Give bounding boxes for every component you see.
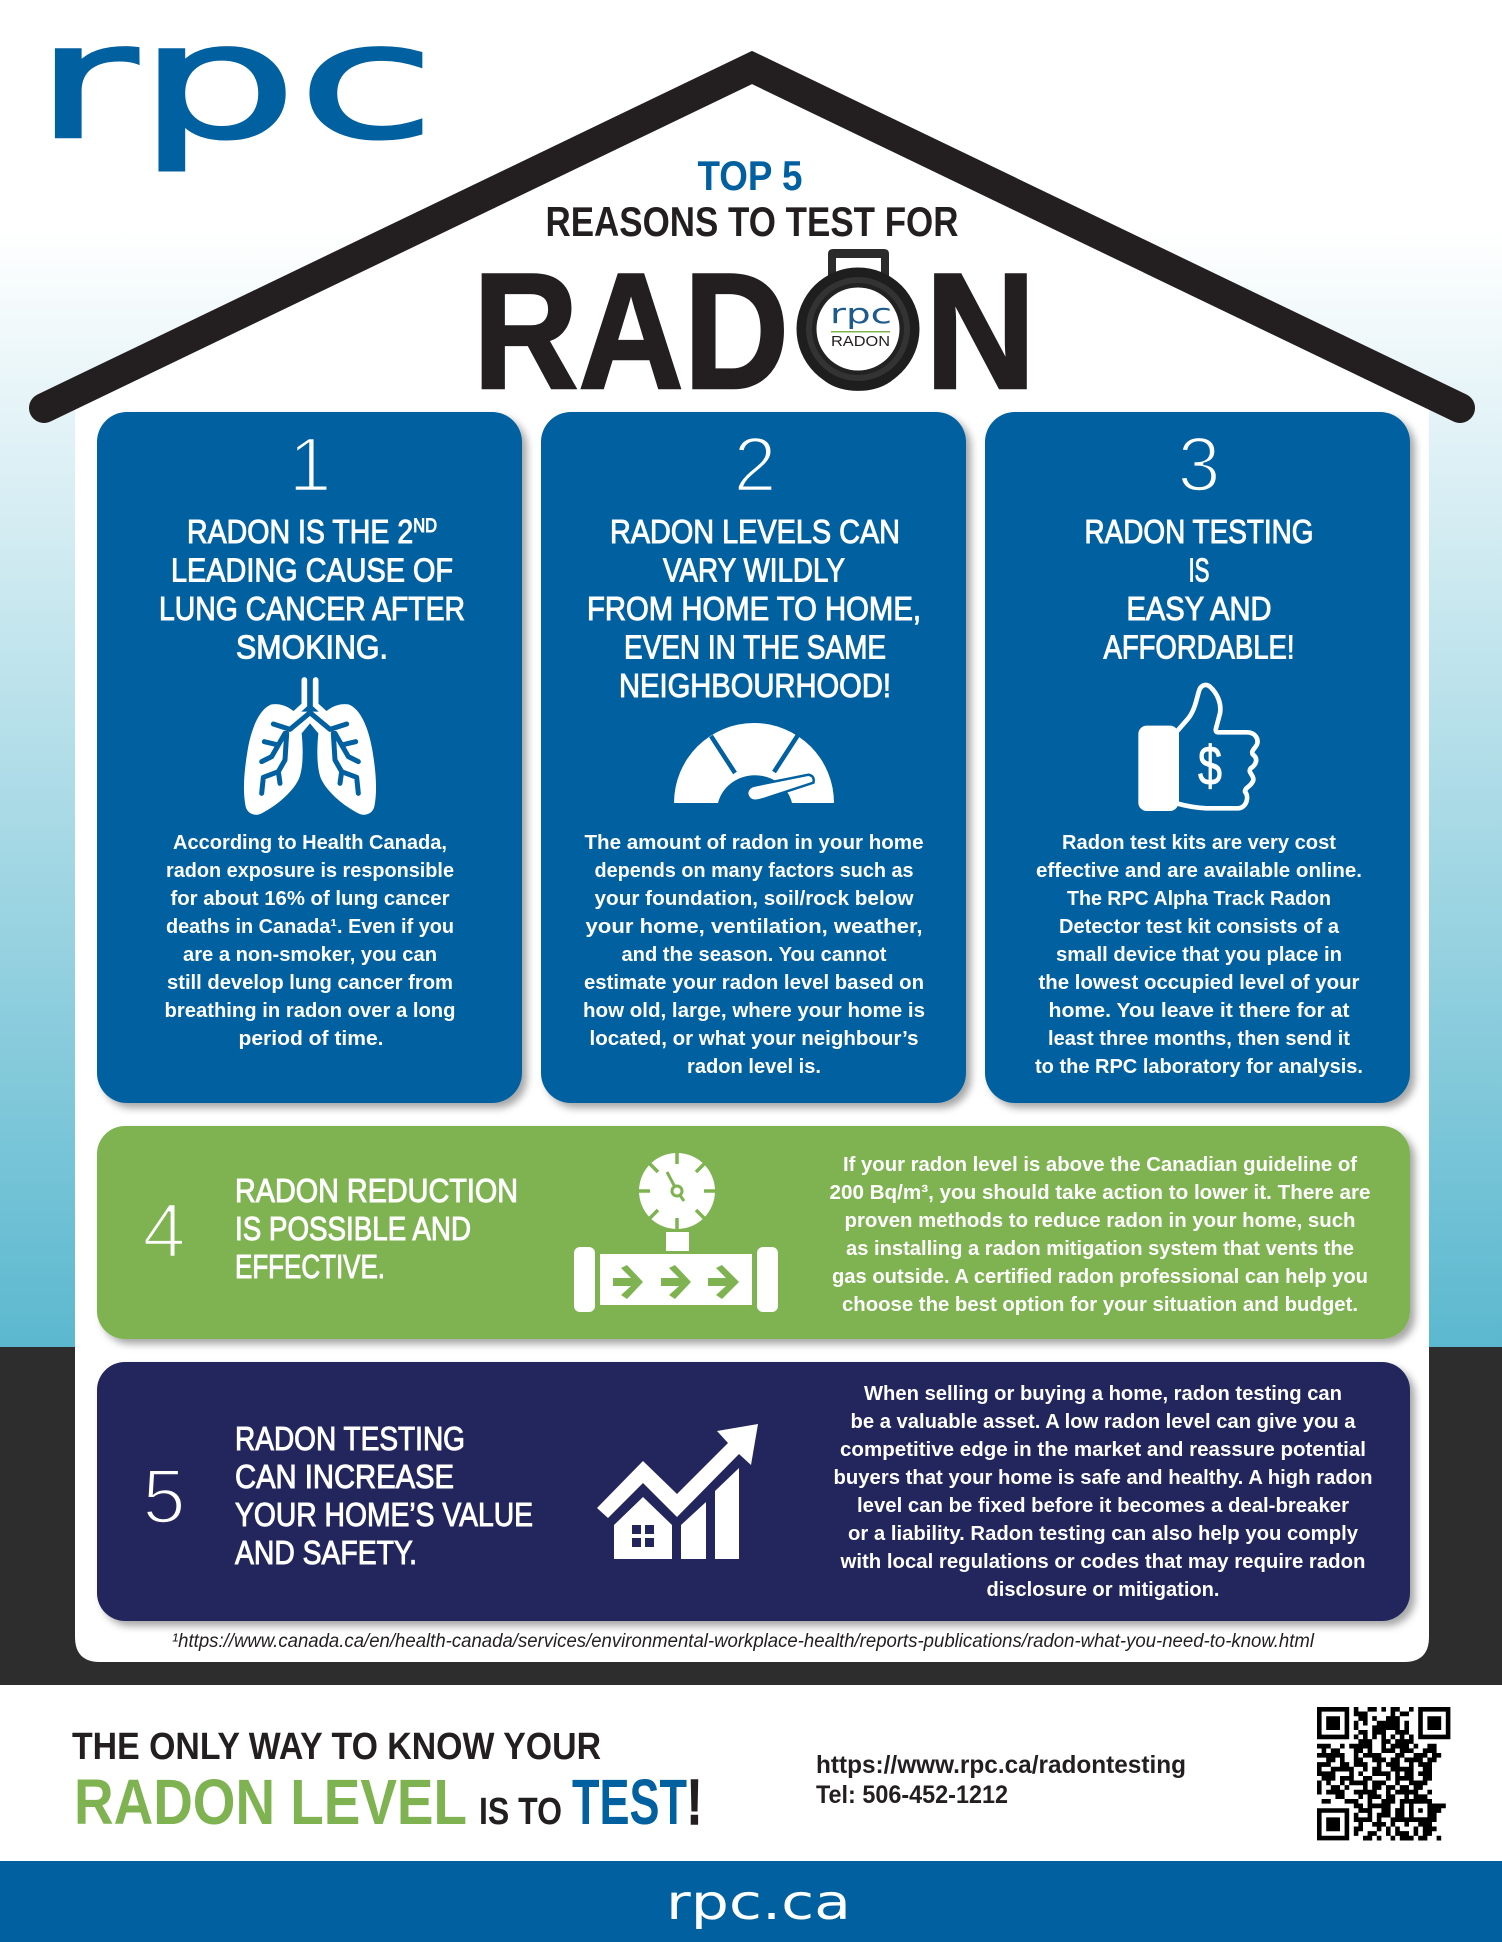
- heading 3: RADON TESTING: [1084, 513, 1314, 550]
- title: radon word: O: [798, 239, 919, 423]
- icon: thumbs up with dollar: [1138, 685, 1258, 811]
- body text 5: When selling or buying a home, radon testing can: [864, 1382, 1342, 1405]
- title: radon word: RAD: [473, 239, 789, 423]
- body text 1: breathing in radon over a long: [164, 999, 456, 1022]
- heading 2: VARY WILDLY: [663, 552, 845, 588]
- body text 1: According to Health Canada,: [173, 831, 447, 854]
- body text 2: your foundation, soil/rock below: [594, 887, 914, 910]
- body text 5: disclosure or mitigation.: [986, 1578, 1220, 1601]
- footer: blue strip: [0, 1861, 1502, 1942]
- body text 3: to the RPC laboratory for analysis.: [1035, 1055, 1363, 1078]
- heading 4: [235, 1172, 518, 1285]
- heading 4: EFFECTIVE.: [235, 1248, 385, 1285]
- body text 3: The RPC Alpha Track Radon: [1067, 887, 1331, 910]
- contact details: https://www.rpc.ca/radontesting: [816, 1751, 1186, 1779]
- body text 4: gas outside. A certified radon professional can help you: [832, 1265, 1368, 1288]
- panel: reason 2: [541, 412, 966, 1103]
- heading 2: RADON LEVELS CAN: [610, 513, 900, 550]
- heading 2: EVEN IN THE SAME: [624, 628, 886, 666]
- body text 1: radon exposure is responsible: [166, 859, 454, 882]
- body text 5: [834, 1382, 1372, 1601]
- body text 5: with local regulations or codes that may require radon: [840, 1550, 1366, 1573]
- body text 3: Detector test kit consists of a: [1059, 915, 1340, 938]
- body text 2: radon level is.: [687, 1055, 821, 1078]
- body text 5: competitive edge in the market and reassure potential: [840, 1438, 1366, 1461]
- body text 4: proven methods to reduce radon in your home, such: [844, 1209, 1356, 1232]
- footer: white strip: [0, 1685, 1502, 1861]
- icon: lungs: [244, 680, 376, 815]
- contact details: Tel: 506-452-1212: [816, 1781, 1008, 1809]
- body text 3: home. You leave it there for at: [1048, 999, 1350, 1022]
- body text 2: [583, 831, 925, 1078]
- icon: pipe with pressure gauge: [574, 1153, 778, 1312]
- body text 1: deaths in Canada¹. Even if you: [166, 915, 454, 938]
- title: top 5: TOP 5: [698, 152, 802, 199]
- heading 5: YOUR HOME’S VALUE: [235, 1496, 533, 1533]
- heading 1: LEADING CAUSE OF: [171, 552, 453, 588]
- heading 3: [1084, 513, 1314, 666]
- number 1: 1: [289, 422, 331, 508]
- house body: [75, 66, 1429, 1662]
- panel: reason 5: [97, 1362, 1410, 1621]
- heading 2: NEIGHBOURHOOD!: [619, 667, 891, 704]
- footer slogan: THE ONLY WAY TO KNOW YOUR: [72, 1726, 601, 1768]
- heading 3: EASY AND: [1126, 590, 1272, 627]
- number 4: 4: [143, 1188, 185, 1274]
- number 2: 2: [734, 422, 776, 508]
- footer logo: rpc.ca: rpc.ca: [666, 1875, 851, 1931]
- heading 1: ND: [413, 516, 437, 537]
- body text 3: effective and are available online.: [1036, 859, 1362, 882]
- title: radon word: N: [925, 239, 1036, 423]
- heading 5: AND SAFETY.: [235, 1534, 417, 1571]
- footer slogan: TEST: [572, 1766, 687, 1838]
- footer slogan: [72, 1726, 702, 1838]
- heading 3: IS: [1188, 552, 1210, 588]
- body text 2: located, or what your neighbour’s: [590, 1027, 918, 1050]
- panel: reason 4: [97, 1126, 1410, 1339]
- body text 4: choose the best option for your situation and budget.: [842, 1293, 1358, 1316]
- body text 5: or a liability. Radon testing can also help you comply: [848, 1522, 1359, 1545]
- body text 1: [164, 831, 456, 1050]
- heading 1: [159, 513, 465, 666]
- panel: reason 1: [97, 412, 522, 1103]
- body text 3: least three months, then send it: [1048, 1027, 1350, 1050]
- body text 2: and the season. You cannot: [622, 943, 887, 966]
- icon: radon detector: [796, 249, 920, 390]
- heading 4: IS POSSIBLE AND: [235, 1210, 471, 1247]
- heading 1: SMOKING.: [236, 628, 388, 666]
- icon: radon detector: rpc: [830, 297, 892, 330]
- body text 1: still develop lung cancer from: [167, 971, 453, 994]
- footer slogan: RADON LEVEL: [74, 1766, 467, 1838]
- panel: reason 3: [985, 412, 1410, 1103]
- body text 2: The amount of radon in your home: [584, 831, 924, 854]
- title: radon word: [473, 239, 1036, 423]
- contact details: [816, 1751, 1186, 1809]
- footer slogan: IS TO: [479, 1791, 562, 1833]
- heading 1: LUNG CANCER AFTER: [159, 590, 465, 627]
- body text 1: for about 16% of lung cancer: [170, 887, 450, 910]
- body text 2: your home, ventilation, weather,: [586, 915, 922, 938]
- icon: house with rising chart: [597, 1424, 758, 1559]
- body text 2: depends on many factors such as: [594, 859, 914, 882]
- body text 1: are a non-smoker, you can: [183, 943, 437, 966]
- body text 2: how old, large, where your home is: [583, 999, 925, 1022]
- body text 3: small device that you place in: [1056, 943, 1342, 966]
- heading 2: FROM HOME TO HOME,: [587, 590, 921, 627]
- heading 2: [587, 513, 921, 704]
- heading 5: [235, 1420, 533, 1571]
- body text 5: level can be fixed before it becomes a deal-breaker: [857, 1494, 1349, 1517]
- body text 4: [830, 1153, 1370, 1316]
- background: sky gradient: [0, 0, 1502, 1347]
- heading 4: RADON REDUCTION: [235, 1172, 518, 1209]
- body text 4: 200 Bq/m³, you should take action to lower it. There are: [830, 1181, 1370, 1204]
- icon: radon detector: RADON: [831, 334, 890, 350]
- footnote: ¹https://www.canada.ca/en/health-canada/services/environmental-workplace-health/reports-publications/radon-what-you-need-to-know.html: [172, 1631, 1315, 1652]
- body text 4: If your radon level is above the Canadian guideline of: [843, 1153, 1357, 1176]
- body text 5: be a valuable asset. A low radon level can give you a: [850, 1410, 1356, 1433]
- footer slogan: !: [687, 1766, 702, 1838]
- body text 3: [1035, 831, 1363, 1078]
- icon: gauge: [674, 723, 834, 803]
- heading 1: RADON IS THE 2: [187, 513, 449, 550]
- number 3: 3: [1178, 422, 1220, 508]
- body text 3: Radon test kits are very cost: [1062, 831, 1336, 854]
- body text 4: as installing a radon mitigation system that vents the: [846, 1237, 1354, 1260]
- background: dark ground band: [0, 1347, 1502, 1685]
- body text 2: estimate your radon level based on: [584, 971, 924, 994]
- roof: [44, 68, 1460, 408]
- title block: [473, 152, 1036, 423]
- number 5: 5: [143, 1454, 185, 1540]
- QR code: [1317, 1707, 1450, 1840]
- body text 1: period of time.: [238, 1027, 384, 1050]
- body text 5: buyers that your home is safe and healthy. A high radon: [834, 1466, 1372, 1489]
- title: reasons to test for: REASONS TO TEST FOR: [546, 198, 958, 245]
- heading 3: AFFORDABLE!: [1104, 628, 1294, 666]
- body text 3: the lowest occupied level of your: [1038, 971, 1360, 994]
- heading 5: CAN INCREASE: [235, 1458, 454, 1495]
- heading 5: RADON TESTING: [235, 1420, 465, 1457]
- icon: thumbs up with dollar: $: [1198, 734, 1222, 797]
